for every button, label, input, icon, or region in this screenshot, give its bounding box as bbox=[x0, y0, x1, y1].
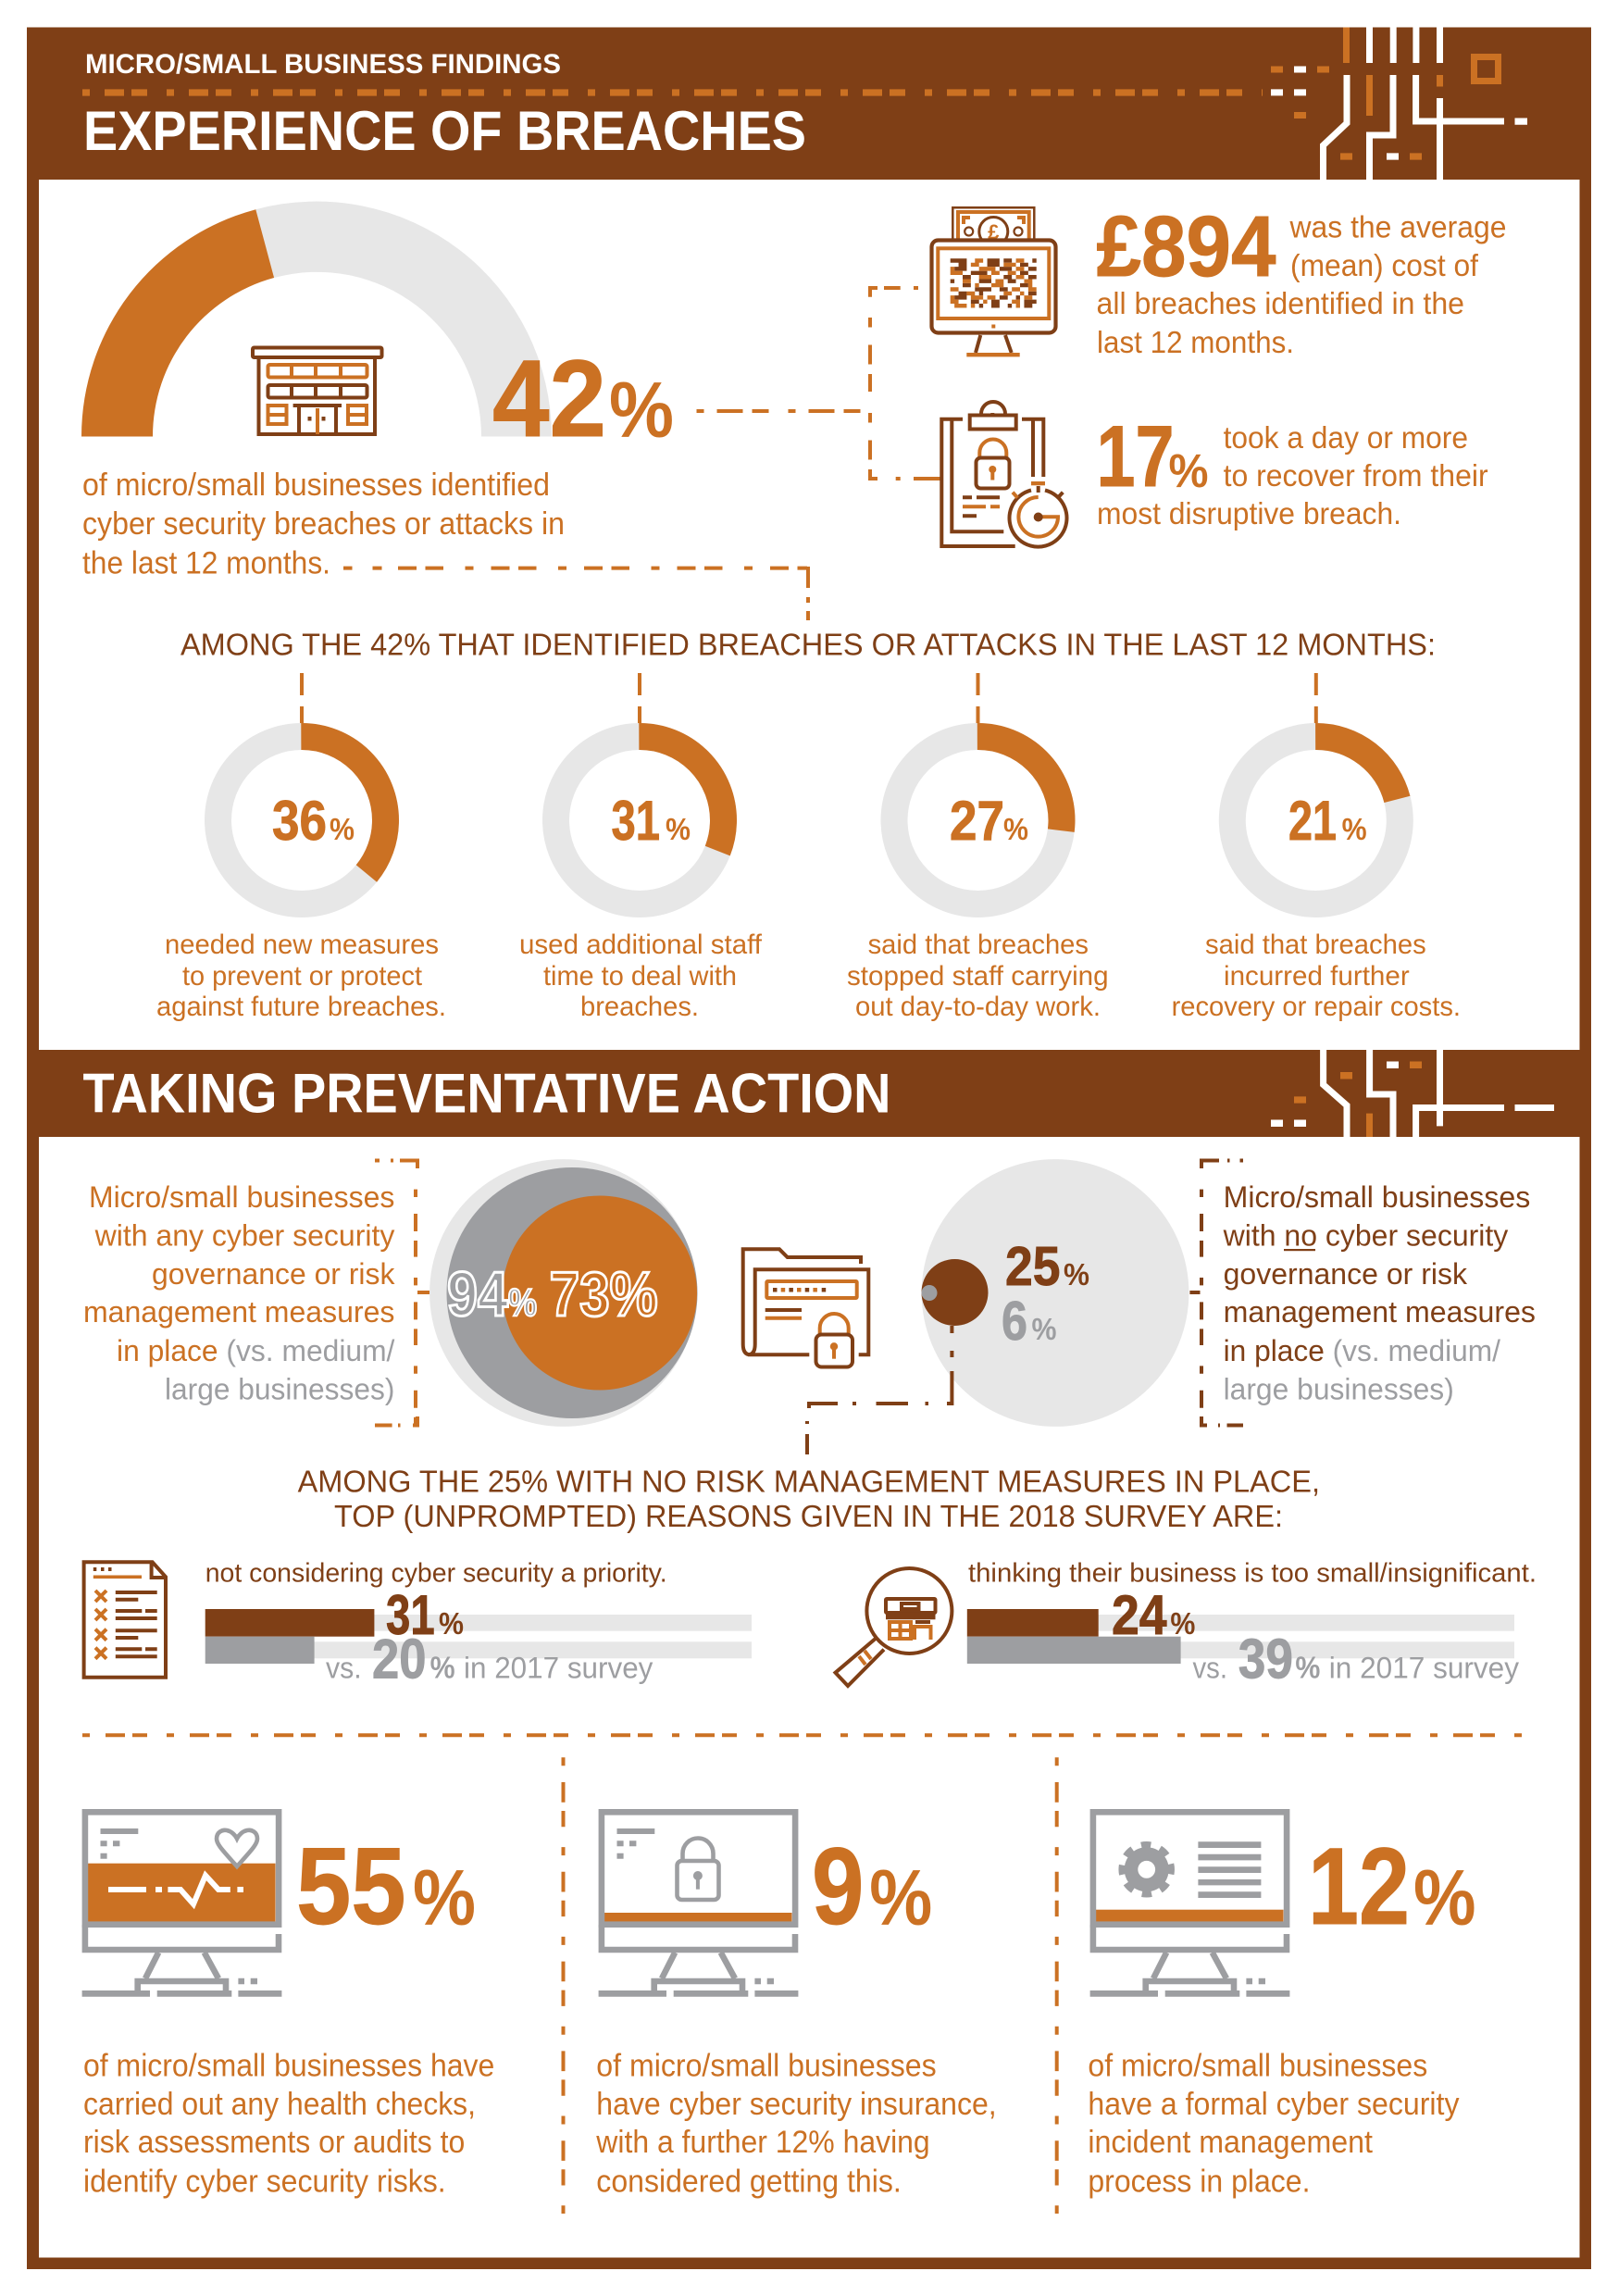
text: businesses with any governance: governance or risk bbox=[152, 1257, 395, 1291]
donut: 31 percent: used additional staff bbox=[519, 930, 763, 960]
text: 42 percent description: of micro/small businesses identified bbox=[82, 468, 550, 503]
stat: 9 percent: 9 bbox=[812, 1826, 864, 1948]
circuit decoration bbox=[1271, 28, 1527, 180]
dashed divider: column one bbox=[561, 1757, 565, 2214]
reason: too small bbox=[967, 1559, 1537, 1691]
sub-heading: among the 25 percent bbox=[298, 1465, 1320, 1534]
icon: magnifying glass over shop bbox=[835, 1568, 952, 1686]
sub-heading: among the 25 percent: TOP (UNPROMPTED) REASONS GIVEN IN THE 2018 SURVEY ARE: bbox=[334, 1500, 1283, 1534]
stat: 17 percent recovery bbox=[1096, 407, 1488, 530]
text: businesses with no governance bbox=[1223, 1180, 1536, 1405]
stat: 9 percent: with a further 12% having bbox=[595, 2125, 930, 2160]
stat: 12 percent bbox=[1088, 1826, 1475, 2199]
stat: 9 percent: have cyber security insurance, bbox=[596, 2087, 997, 2122]
stat: 12 percent: % bbox=[1413, 1854, 1475, 1942]
header band: taking preventative action bbox=[83, 1050, 1554, 1137]
stat: 42 percent bbox=[492, 338, 674, 460]
donut: 21 percent: % bbox=[1342, 812, 1367, 846]
donut: 36 percent: % bbox=[330, 812, 355, 846]
stat: 55 percent: risk assessments or audits to bbox=[83, 2125, 465, 2160]
bar: 2018 value 24 percent: 24 bbox=[1112, 1584, 1167, 1646]
text: businesses with no governance: with no cyber security bbox=[1223, 1218, 1508, 1252]
donut: 27 percent bbox=[847, 673, 1109, 1022]
dashed divider: column two bbox=[1055, 1757, 1059, 2214]
section title: EXPERIENCE OF BREACHES bbox=[83, 100, 806, 162]
stat: 9 percent bbox=[595, 1826, 997, 2199]
eyebrow heading: MICRO/SMALL BUSINESS FINDINGS bbox=[85, 49, 561, 80]
text: businesses with no governance: governance or risk bbox=[1224, 1257, 1468, 1291]
circle chart: 25 and 6 percent: % bbox=[1031, 1312, 1057, 1346]
header band: experience of breaches bbox=[82, 28, 1527, 180]
stat: 42 percent: % bbox=[609, 367, 674, 455]
donut: 21 percent: incurred further bbox=[1224, 961, 1410, 992]
bar: 2017 value 20 percent: vs. bbox=[326, 1652, 362, 1685]
donut: 21 percent: said that breaches bbox=[1205, 930, 1426, 960]
reason: not a priority: not considering cyber security a priority. bbox=[205, 1559, 667, 1589]
donut: 21 percent: recovery or repair costs. bbox=[1172, 992, 1461, 1022]
connector: 42 percent to cost and recovery stats bbox=[696, 288, 940, 479]
icon: clipboard with lock and stopwatch bbox=[941, 402, 1066, 547]
text: businesses with any governance: large businesses) bbox=[165, 1372, 394, 1405]
bar: 2018 value 24 percent bbox=[967, 1584, 1514, 1646]
text: businesses with any governance: with any cyber security bbox=[94, 1218, 394, 1252]
gauge: 42 percent bbox=[81, 202, 552, 437]
bar: 2017 value 39 percent: in 2017 survey bbox=[1329, 1652, 1519, 1685]
stat: 55 percent: carried out any health checks, bbox=[83, 2087, 476, 2122]
icon: monitor with padlock bbox=[599, 1812, 798, 1997]
donut: 31 percent bbox=[519, 673, 763, 1022]
stat: 12 percent: have a formal cyber security bbox=[1088, 2087, 1459, 2122]
section title: TAKING PREVENTATIVE ACTION bbox=[83, 1063, 890, 1125]
stat: 42 percent: 42 bbox=[492, 338, 606, 460]
stat: 17 percent recovery: 17 bbox=[1096, 407, 1174, 505]
venn chart: 94 and 73 percent: % bbox=[508, 1280, 537, 1324]
bar: 2018 value 31 percent: % bbox=[439, 1606, 464, 1641]
text: businesses with any governance: in place (vs. medium/ bbox=[117, 1334, 395, 1367]
stat: 55 percent bbox=[83, 1826, 494, 2199]
circle chart: 25 and 6 percent bbox=[922, 1159, 1189, 1427]
sub-heading: among the 42 percent: AMONG THE 42% THAT IDENTIFIED BREACHES OR ATTACKS IN THE LAST 12 MONTHS: bbox=[180, 629, 1436, 663]
bar: 2017 value 20 percent: 20 bbox=[372, 1628, 426, 1691]
stat: 55 percent: of micro/small businesses have bbox=[83, 2048, 494, 2083]
donut: 27 percent: stopped staff carrying bbox=[847, 961, 1109, 992]
donut: 27 percent: said that breaches bbox=[868, 930, 1089, 960]
text: businesses with no governance: Micro/small businesses bbox=[1224, 1180, 1530, 1214]
text: 42 percent description: cyber security breaches or attacks in bbox=[82, 506, 565, 542]
sub-heading: among the 25 percent: AMONG THE 25% WITH NO RISK MANAGEMENT MEASURES IN PLACE, bbox=[298, 1465, 1320, 1499]
stat: 12 percent: 12 bbox=[1308, 1826, 1410, 1948]
bar: 2017 value 39 percent bbox=[967, 1628, 1519, 1691]
icon: folder with lock bbox=[743, 1249, 868, 1366]
stat: 12 percent: of micro/small businesses bbox=[1088, 2048, 1427, 2083]
stat: 55 percent: identify cyber security risks. bbox=[83, 2164, 446, 2199]
bar: 2018 value 24 percent: % bbox=[1170, 1606, 1195, 1641]
stat: 9 percent: considered getting this. bbox=[596, 2164, 902, 2199]
stat: average cost: all breaches identified in the bbox=[1096, 286, 1464, 320]
donut: 27 percent: 27 bbox=[950, 790, 1004, 852]
circuit decoration bbox=[1271, 1050, 1554, 1137]
reason: too small: thinking their business is too small/insignificant. bbox=[968, 1559, 1537, 1589]
donut: 31 percent: 31 bbox=[611, 790, 660, 852]
bracket: left dashed bbox=[375, 1161, 429, 1427]
dashed divider: horizontal bbox=[82, 1733, 1528, 1737]
bracket: right dashed bbox=[1189, 1161, 1243, 1427]
connector: circle to reasons heading bbox=[807, 1326, 952, 1454]
circle chart: 25 and 6 percent: 25 bbox=[1005, 1236, 1061, 1297]
bar: 2017 value 39 percent: 39 bbox=[1238, 1628, 1293, 1691]
bar: 2017 value 20 percent: in 2017 survey bbox=[464, 1652, 653, 1685]
bar: 2017 value 39 percent: % bbox=[1295, 1650, 1320, 1685]
stat: 17 percent recovery: most disruptive breach. bbox=[1097, 496, 1401, 530]
bar: 2018 value 31 percent bbox=[205, 1584, 752, 1646]
venn chart: 94 and 73 percent: 94 bbox=[447, 1259, 508, 1329]
venn chart: 94 and 73 percent bbox=[429, 1159, 698, 1427]
donut: 27 percent: out day-to-day work. bbox=[855, 992, 1101, 1022]
connector: description to sub-heading bbox=[343, 567, 808, 620]
text: businesses with any governance: Micro/small businesses bbox=[89, 1180, 394, 1214]
header dashed rule bbox=[82, 89, 1263, 96]
icon: monitor with health check bbox=[82, 1812, 281, 1997]
donut: 27 percent: % bbox=[1003, 812, 1028, 846]
bar: 2017 value 39 percent: vs. bbox=[1192, 1652, 1227, 1685]
circle chart: 25 and 6 percent: 6 bbox=[1002, 1291, 1027, 1352]
donut: 36 percent bbox=[156, 673, 446, 1022]
stat: 17 percent recovery: took a day or more bbox=[1224, 420, 1468, 455]
icon: monitor with banknote bbox=[931, 207, 1055, 356]
circle chart: 25 and 6 percent: % bbox=[1064, 1257, 1089, 1292]
text: businesses with any governance bbox=[83, 1180, 395, 1405]
text: businesses with any governance: management measures bbox=[83, 1295, 394, 1329]
donut: 21 percent bbox=[1172, 673, 1461, 1022]
venn chart: 94 and 73 percent: 73% bbox=[550, 1259, 658, 1329]
icon: monitor with gear and text lines bbox=[1090, 1812, 1289, 1997]
stat: average cost: £894 bbox=[1096, 198, 1276, 294]
bar: 2017 value 20 percent bbox=[205, 1628, 752, 1691]
stat: 17 percent recovery: to recover from their bbox=[1224, 458, 1488, 493]
bar: 2018 value 31 percent: 31 bbox=[386, 1584, 435, 1646]
stat: average cost: (mean) cost of bbox=[1290, 248, 1479, 282]
stat: 9 percent: of micro/small businesses bbox=[596, 2048, 937, 2083]
text: businesses with no governance: large businesses) bbox=[1224, 1372, 1454, 1405]
donut: 31 percent: % bbox=[666, 812, 691, 846]
stat: average cost: last 12 months. bbox=[1097, 325, 1294, 359]
stat: 9 percent: % bbox=[869, 1854, 932, 1942]
donut: 36 percent: to prevent or protect bbox=[182, 961, 423, 992]
stat: average cost bbox=[1096, 198, 1507, 359]
text: 42 percent description bbox=[82, 468, 565, 581]
icon: document checklist bbox=[84, 1562, 166, 1678]
donut: 36 percent: 36 bbox=[272, 790, 327, 852]
stat: 55 percent: % bbox=[413, 1854, 476, 1942]
stat: 17 percent recovery: % bbox=[1168, 444, 1209, 497]
icon: shop building bbox=[253, 348, 381, 434]
stat: average cost: was the average bbox=[1289, 210, 1507, 244]
text: 42 percent description: the last 12 months. bbox=[82, 546, 330, 581]
donut: 36 percent: needed new measures bbox=[165, 930, 439, 960]
reason: not a priority bbox=[205, 1559, 752, 1691]
icon: monitor with banknote: £ bbox=[988, 220, 1000, 243]
text: businesses with no governance: management measures bbox=[1224, 1295, 1536, 1329]
donut: 21 percent: 21 bbox=[1288, 790, 1337, 852]
donut: 36 percent: against future breaches. bbox=[156, 992, 446, 1022]
text: businesses with no governance: in place (vs. medium/ bbox=[1224, 1334, 1500, 1367]
donut: 31 percent: time to deal with bbox=[543, 961, 737, 992]
bar: 2017 value 20 percent: % bbox=[430, 1650, 455, 1685]
stat: 12 percent: process in place. bbox=[1088, 2164, 1311, 2199]
stat: 12 percent: incident management bbox=[1088, 2125, 1374, 2160]
donut: 31 percent: breaches. bbox=[580, 992, 699, 1022]
stat: 55 percent: 55 bbox=[296, 1826, 406, 1948]
